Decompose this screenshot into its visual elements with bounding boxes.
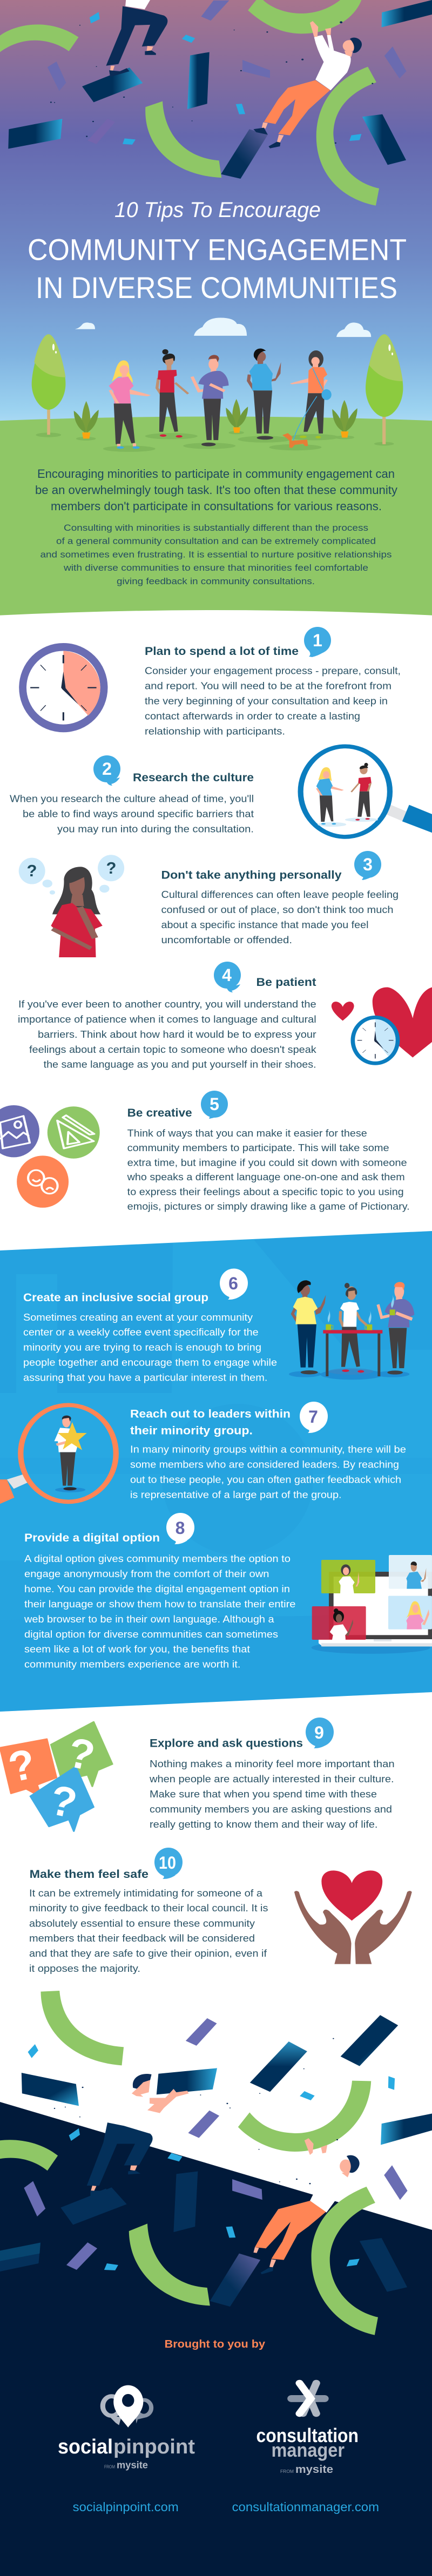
panel: tip 3 do not take anything personally (19, 851, 399, 957)
title: line one: COMMUNITY ENGAGEMENT (28, 232, 407, 267)
heading (130, 1408, 291, 1437)
logo wordmark: consultation manager: manager (271, 2439, 345, 2461)
bubble number 5 (201, 1091, 228, 1119)
heading: Be patient (256, 976, 316, 989)
panel: tip 9 explore and ask questions (0, 1718, 395, 1831)
lower confetti (66, 2227, 360, 2270)
intro text: lead paragraph (35, 467, 398, 513)
panel: tip 7 reach out to leaders (0, 1402, 406, 1504)
body text: web browser to be in their own language. Although a (24, 1614, 275, 1625)
body text: emojis, pictures or simply drawing like a game of Pictionary. (127, 1201, 410, 1212)
logo mark: social pinpoint (103, 2385, 151, 2428)
bubble number 1: 1 (313, 631, 322, 650)
body text (23, 1312, 277, 1383)
body text: you may run into during the consultation. (57, 824, 254, 835)
body text: If you've ever been to another country, you will understand the (18, 999, 316, 1010)
green arcs lower (129, 2187, 378, 2335)
orange trousers (255, 2201, 326, 2260)
icon: thinking woman with question bubbles (19, 855, 124, 957)
title: line two: IN DIVERSE COMMUNITIES (36, 271, 397, 305)
body text: really getting to know them and their way of life. (150, 1819, 378, 1830)
body text: to express their feelings about a specific topic to you using (127, 1187, 404, 1198)
body text: when people are actually interested in their culture. (149, 1774, 394, 1784)
confetti: faint purple (48, 1, 407, 144)
icon: question speech bubbles: ? (64, 1728, 99, 1780)
body text: about a specific instance that made you feel (161, 919, 368, 930)
panel: tip 4 be patient (18, 962, 432, 1070)
green ground (0, 416, 432, 616)
question marks: ? (27, 861, 37, 880)
body text: and that they are safe to give their opinion, even if (29, 1948, 267, 1959)
body text: digital option for diverse communities can sometimes (24, 1629, 278, 1640)
footer illustration upper: falling shapes (0, 1991, 432, 2232)
bubble number 7 (300, 1402, 328, 1433)
speckle dots (50, 21, 373, 144)
bubble number 4: 4 (222, 965, 232, 985)
bubble number 10 (154, 1848, 183, 1879)
bubble number 3: 3 (363, 855, 373, 874)
white shirt of falling man (303, 2172, 343, 2213)
body text (24, 1553, 296, 1670)
intro text: second paragraph: with diverse communities to ensure that minorities feel comfortable (63, 563, 368, 573)
footer navy background (0, 2102, 432, 2576)
body text: extra time, but imagine if you could sit down with someone (127, 1158, 407, 1168)
footer illustration lower: falling shapes and figure (0, 2172, 407, 2428)
body text: the very beginning of your consultation and keep in (145, 696, 388, 707)
person: yellow shirt (293, 1280, 326, 1374)
figure: reaching man (87, 2074, 188, 2199)
body text (145, 666, 401, 736)
heading: Plan to spend a lot of time (145, 645, 299, 658)
body text: contact afterwards in order to create a lasting (145, 711, 360, 721)
icon: question speech bubbles: ? (46, 1776, 81, 1828)
logo wordmark: consultation manager: mysite (295, 2464, 333, 2476)
body text: Sometimes creating an event at your community (23, 1312, 253, 1323)
body text: their language or show them how to translate their entire (24, 1599, 296, 1610)
body text: confused or out of place, so don't think too much (161, 904, 393, 915)
heading: Provide a digital option (24, 1531, 160, 1544)
body text (149, 1759, 395, 1830)
intro text: second paragraph: giving feedback in community consultations. (117, 576, 315, 586)
body text: minority you are trying to reach is enough to bring (23, 1342, 261, 1353)
logo wordmark: social pinpoint: social (58, 2436, 113, 2458)
logo wordmark: consultation manager: consultation (256, 2424, 359, 2446)
body text: community members experience are worth it. (24, 1659, 240, 1670)
body text: Make sure that when you spend time with these (150, 1789, 377, 1800)
tree left (32, 334, 65, 435)
figure: falling man in orange trousers (253, 21, 362, 148)
body text: Consider your engagement process - prepare, consult, (145, 666, 401, 677)
navy blocks (22, 2015, 432, 2232)
body text: When you research the culture ahead of time, you'll (10, 794, 254, 804)
body text: be able to find ways around specific barriers that (23, 809, 254, 820)
heading: Reach out to leaders within (130, 1408, 291, 1421)
tile: white (389, 1555, 432, 1589)
body text: seem like a lot of work for you, the benefits that (24, 1644, 250, 1655)
bubble number 3 (354, 851, 381, 880)
body text: engage anonymously from the comfort of their own (24, 1568, 269, 1579)
bubble number 8: 8 (176, 1518, 185, 1538)
body text: Nothing makes a minority feel more important than (150, 1759, 395, 1769)
body text: assuring that you have a particular interest in them. (23, 1372, 267, 1383)
panel: tip 1 plan to spend a lot of time (19, 627, 401, 736)
tile: light blue (388, 1596, 432, 1630)
bubble number 7: 7 (308, 1407, 318, 1426)
body text: uncomfortable or offended. (161, 935, 292, 945)
feet and boot (253, 2247, 276, 2274)
heading: Explore and ask questions (150, 1737, 303, 1750)
intro text: second paragraph: and sometimes even frustrating. It is essential to nurture positive relationships (40, 550, 392, 559)
tile: red (312, 1606, 366, 1640)
illustration: laptop video call (312, 1555, 432, 1654)
body text: is representative of a large part of the group. (130, 1489, 342, 1500)
icon: creative circles (0, 1105, 100, 1208)
intro text: second paragraph: Consulting with minorities is substantially different than the process (64, 523, 368, 533)
figure: raised hands and head (305, 2138, 360, 2178)
icon: hands holding heart (294, 1870, 412, 1964)
logo wordmark: social pinpoint: pinpoint (113, 2436, 195, 2458)
green arcs (0, 0, 379, 206)
confetti: blue diamonds (90, 12, 361, 145)
clouds (75, 318, 371, 337)
illustration: people around a coffee table (289, 1280, 414, 1380)
body text: feelings about a certain topic to someone who doesn't speak (29, 1044, 317, 1055)
footer links (73, 2500, 379, 2514)
panel: tip 5 be creative (0, 1091, 410, 1212)
footer: brought to you by: Brought to you by (165, 2338, 266, 2350)
ground shadows (36, 431, 394, 452)
body text: some members who are considered leaders. By reaching (130, 1459, 399, 1470)
bubble number 10: 10 (159, 1853, 176, 1872)
body text: home. You can provide the digital engagement option in (24, 1584, 290, 1594)
lower blocks (0, 2238, 407, 2307)
body text: barriers. Think about how hard it would be to express your (38, 1029, 316, 1040)
body text: community members to participate. This will take some (127, 1142, 389, 1153)
bubble number 6: 6 (228, 1274, 238, 1293)
panel: tip 6 inclusive social group (23, 1269, 414, 1383)
person: purple shirt with mug (378, 1282, 414, 1375)
tile: green (321, 1560, 375, 1593)
person: red shirt (157, 349, 188, 437)
green arcs upper (0, 1991, 371, 2171)
intro text: lead paragraph: Encouraging minorities to participate in community engagement can (37, 467, 395, 481)
body text: A digital option gives community members the option to (24, 1553, 291, 1564)
body text: minority to give feedback to their local council. It is (29, 1903, 268, 1914)
blue confetti (28, 2044, 395, 2161)
heading: Be creative (127, 1106, 192, 1119)
panel: tip 8 provide a digital option (24, 1513, 432, 1670)
logo wordmark: social pinpoint: mysite (117, 2460, 148, 2471)
heading: their minority group. (130, 1424, 253, 1437)
body text: In many minority groups within a community, there will be (130, 1444, 406, 1455)
body text: and report. You will need to be at the forefront from (145, 681, 392, 692)
body text (130, 1444, 406, 1500)
panel: blue section background (0, 1231, 432, 1712)
confetti: navy blocks (8, 0, 432, 179)
body text (18, 999, 317, 1070)
heading: Research the culture (133, 771, 254, 784)
intro text: lead paragraph: be an overwhelmingly tough task. It's too often that these community (35, 483, 398, 497)
body text: members that their feedback will be considered (29, 1933, 255, 1944)
intro text: second paragraph (40, 523, 392, 586)
logo wordmark: consultation manager: FROM (280, 2469, 294, 2474)
bubble number 6 (220, 1269, 248, 1300)
intro text: second paragraph: of a general community consultation and can be extremely complicated (56, 536, 376, 546)
panel: tip 10 make them feel safe (29, 1848, 412, 1974)
bubble number 4 (214, 962, 241, 992)
purple confetti (24, 2018, 408, 2216)
plants (74, 399, 357, 438)
logo wordmark: social pinpoint (58, 2436, 195, 2471)
title (28, 198, 407, 305)
body text: absolutely essential to ensure these community (29, 1918, 255, 1929)
body text (29, 1888, 268, 1974)
question marks (27, 858, 116, 880)
figure: climbing man legs (106, 0, 167, 77)
body text: center or a weekly coffee event specifically for the (23, 1327, 259, 1338)
laptop (319, 1572, 432, 1646)
bubble number 1 (304, 627, 331, 657)
person: white shirt (340, 1283, 367, 1372)
icon: question speech bubbles (0, 1722, 112, 1831)
bubble number 9: 9 (314, 1723, 324, 1742)
body text: relationship with participants. (145, 726, 285, 736)
tree right (366, 334, 403, 444)
bubble number 2: 2 (102, 759, 112, 779)
header sky background (0, 0, 432, 454)
heading: Make them feel safe (30, 1868, 148, 1881)
intro text: lead paragraph: members don't participate in consultations for various reasons. (51, 499, 382, 513)
body text: importance of patience when it comes to language and cultural (18, 1014, 316, 1025)
question marks: ? (106, 858, 116, 877)
logo wordmark: social pinpoint: FROM (104, 2464, 115, 2470)
heading: Don't take anything personally (161, 869, 342, 882)
body text: out to these people, you can often gather feedback which (130, 1475, 401, 1485)
body text: it opposes the majority. (29, 1963, 140, 1974)
icon: magnifier with two people (301, 746, 432, 837)
person: pink shirt (109, 360, 151, 449)
body text (127, 1128, 410, 1212)
bubble number 5: 5 (210, 1094, 219, 1114)
icon: orange magnifier with star person (0, 1405, 116, 1504)
body text: the same language as you and put yourself in their shoes. (44, 1059, 316, 1070)
footer links: socialpinpoint.com (73, 2500, 179, 2514)
body text: community members you are asking questions and (150, 1804, 392, 1815)
person: purple shirt (192, 355, 228, 447)
body text (10, 794, 254, 835)
icon: hearts and clock (332, 987, 432, 1065)
bubble number 9 (306, 1718, 334, 1748)
logo wordmark: consultation manager (256, 2424, 359, 2476)
park scene: clouds, ground, trees, plants and people (0, 318, 432, 616)
coffee table (323, 1330, 382, 1376)
speckle dots (54, 2038, 338, 2184)
person: blue shirt (248, 348, 281, 440)
title: subtitle: 10 Tips To Encourage (114, 198, 321, 222)
body text (161, 889, 399, 945)
icon: question speech bubbles: ? (4, 1740, 39, 1791)
mugs (326, 1294, 395, 1330)
bubble number 8 (166, 1513, 194, 1544)
panel: tip 2 research the culture (10, 746, 432, 837)
body text: Think of ways that you can make it easier for these (127, 1128, 367, 1139)
bubble number 2 (93, 755, 120, 786)
body text: It can be extremely intimidating for someone of a (29, 1888, 263, 1898)
logo mark: consultation manager (292, 2383, 325, 2413)
footer links: consultationmanager.com (232, 2500, 379, 2514)
body text: people together and encourage them to engage while (23, 1357, 277, 1368)
header illustration: falling shapes and figures (0, 0, 432, 206)
person: orange shirt with bag and dog (282, 350, 332, 448)
body text: who speaks a different language one-on-one and ask them (127, 1172, 405, 1182)
heading: Create an inclusive social group (23, 1291, 208, 1304)
body text: Cultural differences can often leave people feeling (161, 889, 399, 900)
icon: clock (19, 643, 107, 732)
